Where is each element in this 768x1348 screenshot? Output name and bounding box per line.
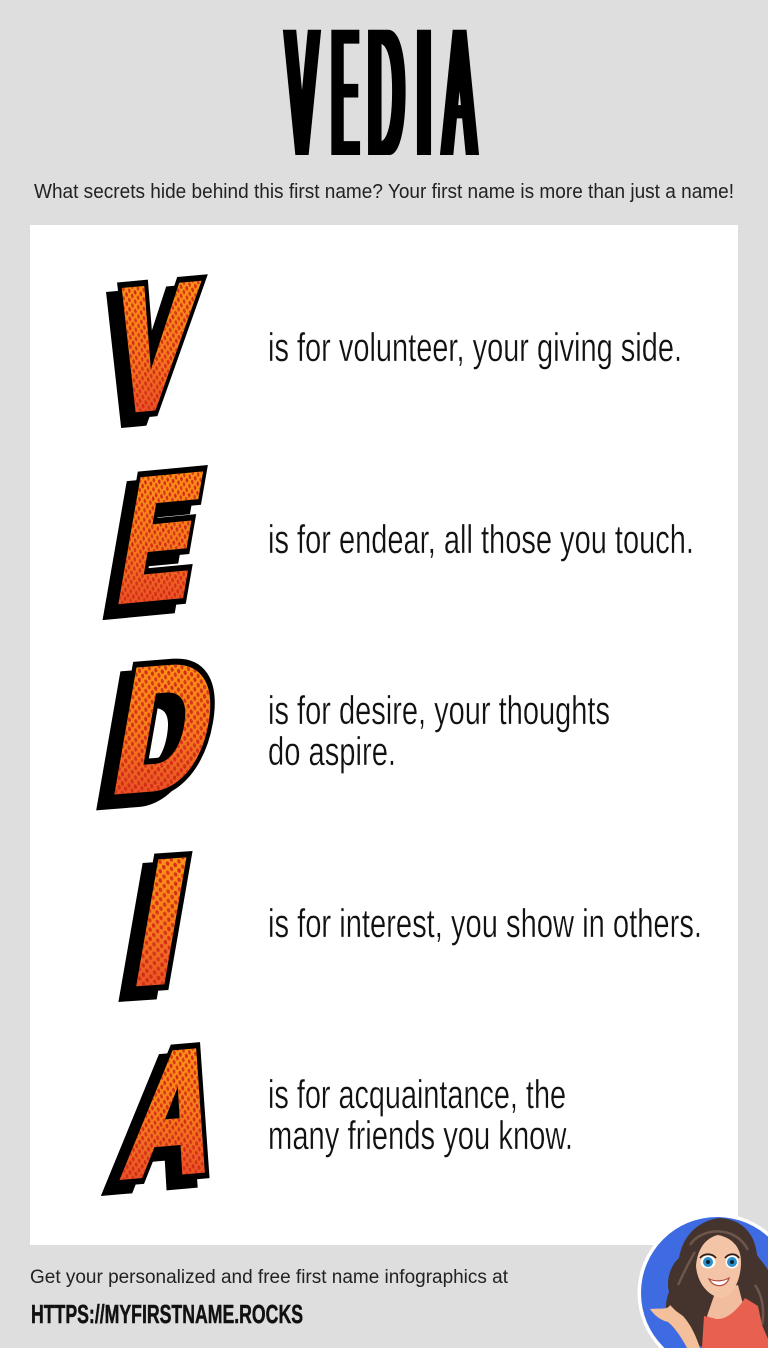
letter E row	[97, 438, 694, 647]
comic letter A: A	[103, 1023, 220, 1222]
arm and hand	[650, 1305, 700, 1348]
comic letter D: D	[91, 638, 214, 837]
letter A row	[103, 1014, 573, 1222]
comic letter D: D	[103, 628, 227, 828]
comic letter E: E	[108, 438, 213, 637]
face	[696, 1235, 741, 1298]
comic letter A: A	[115, 1014, 231, 1213]
comic letter I: I	[124, 825, 198, 1020]
lines: A: many friends you know.	[268, 1114, 573, 1158]
comic letter D: D	[103, 628, 227, 828]
hair	[666, 1218, 768, 1348]
footer url: HTTPS://MYFIRSTNAME.ROCKS	[31, 1299, 303, 1329]
panel: letters	[30, 225, 738, 1245]
eyes	[700, 1256, 716, 1268]
subtitle: What secrets hide behind this first name? Your first name is more than just a name!	[34, 181, 734, 203]
comic letter I: I	[113, 835, 186, 1029]
comic letter V: V	[105, 247, 203, 447]
lines: A: is for acquaintance, the	[268, 1073, 566, 1117]
comic letter E: E	[97, 447, 201, 647]
comic letter D: D	[103, 628, 227, 828]
comic letter A: A	[115, 1014, 231, 1213]
lines: D	[268, 689, 610, 774]
comic letter I: I	[124, 825, 198, 1020]
comic letter A: A	[115, 1014, 231, 1213]
comic letter V: V	[105, 247, 203, 447]
letter I row	[113, 825, 702, 1029]
letter D row	[91, 628, 610, 837]
letter V row	[94, 247, 682, 457]
comic letter V: V	[105, 247, 203, 447]
comic letter V: V	[94, 257, 192, 457]
comic letter E: E	[108, 438, 213, 637]
avatar	[638, 1214, 768, 1348]
footer text: Get your personalized and free first name infographics at	[30, 1267, 509, 1288]
lines: D: do aspire.	[268, 730, 396, 774]
comic letter I: I	[124, 825, 198, 1020]
lines: A	[268, 1073, 573, 1158]
comic letter E: E	[108, 438, 213, 637]
title	[287, 0, 475, 195]
lines: D: is for desire, your thoughts	[268, 689, 610, 733]
shirt	[702, 1298, 768, 1348]
neck	[707, 1285, 742, 1319]
mouth	[709, 1278, 729, 1286]
